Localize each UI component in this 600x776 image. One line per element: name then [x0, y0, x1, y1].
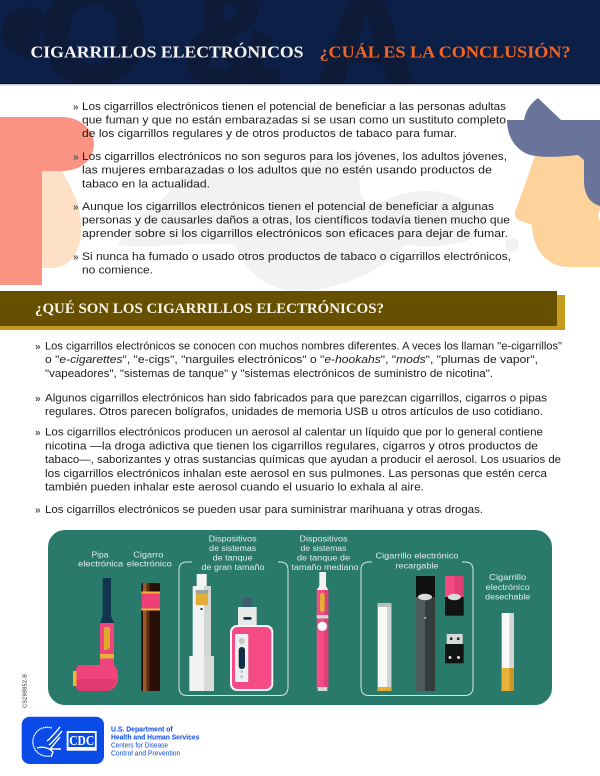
definition text block: Algunos cigarrillos electrónicos han sido fabricados para que parezcan cigarrillos, cigarros o pipas — [45, 392, 547, 404]
label: medium tank: Dispositivos — [300, 534, 348, 544]
icon: pod cartridge — [445, 576, 464, 616]
section banner — [0, 291, 565, 330]
definition text block: Los cigarrillos electrónicos se pueden usar para suministrar marihuana y otras drogas. — [45, 504, 483, 516]
agency names: U.S. Department of — [111, 726, 173, 734]
right profile: face and hair — [507, 98, 600, 267]
conclusions text block: » — [73, 252, 79, 263]
title: CIGARRILLOS ELECTRÓNICOS — [30, 42, 304, 62]
definition text block: » — [35, 394, 41, 404]
definition text block: los cigarrillos electrónicos inhalan este aerosol en sus pulmones. Las personas que estén cerca — [45, 468, 547, 480]
logo: HHS and CDC — [22, 717, 104, 764]
definition text block: nicotina —la droga adictiva que tienen los cigarrillos regulares, cigarros y otros productos de — [45, 440, 538, 452]
definition text block: » — [35, 428, 41, 438]
label: disposable: desechable — [485, 592, 530, 602]
label: large tank: de sistemas — [209, 544, 256, 553]
label: disposable: Cigarrillo — [489, 573, 527, 582]
agency names: Centers for Disease — [111, 742, 168, 750]
label: medium tank — [292, 534, 359, 572]
agency names: Health and Human Services — [111, 734, 199, 742]
conclusions text block: las mujeres embarazadas o los adultos que no estén usando productos de — [82, 164, 492, 176]
conclusions text block: » — [73, 102, 79, 113]
definition text block: regulares. Otros parecen bolígrafos, unidades de memoria USB u otros artículos de uso cotidiano. — [45, 406, 543, 418]
agency names — [111, 726, 199, 758]
conclusions text block: » — [73, 202, 79, 213]
conclusions text block: » — [73, 152, 79, 163]
label: medium tank: de tanque de — [297, 554, 350, 562]
conclusions text block: aprender sobre si los cigarrillos electrónicos son eficaces para dejar de fumar. — [82, 228, 508, 240]
label: medium tank: tamaño mediano — [292, 563, 359, 572]
label: e-cigar — [127, 550, 173, 568]
bracket: rechargeable group — [361, 562, 473, 696]
conclusions text block: Aunque los cigarrillos electrónicos tienen el potencial de beneficiar a algunas — [82, 201, 494, 213]
logo: HHS and CDC: CDC — [69, 734, 94, 749]
conclusions text block: personas y de causarles daños a otras, los científicos todavía tienen mucho que — [82, 214, 510, 226]
label: large tank: de tanque — [213, 554, 253, 562]
label: e-cigar: electrónico — [127, 560, 173, 568]
definition text block: » — [35, 342, 41, 352]
label: rechargeable — [376, 552, 459, 570]
definition text block: » — [35, 505, 41, 516]
label: disposable — [485, 573, 530, 602]
subtitle question: ¿CUÁL ES LA CONCLUSIÓN? — [320, 42, 570, 62]
section banner: ¿QUÉ SON LOS CIGARRILLOS ELECTRÓNICOS? — [35, 300, 384, 317]
label: rechargeable: recargable — [396, 562, 438, 570]
agency names: Control and Prevention — [111, 750, 180, 758]
definition text block: "vapeadores", "sistemas de tanque" y "sistemas electrónicos de suministro de nicotina". — [45, 368, 493, 380]
conclusions text block: Si nunca ha fumado o usado otros productos de tabaco o cigarrillos electrónicos, — [82, 251, 511, 263]
publication code: CS298852-B — [22, 674, 28, 708]
definition text block: o "e-cigarettes ", "e-cigs", "narguiles electrónicos" o " e-hookahs ", "mods ", "plumas de vapor", — [45, 354, 538, 366]
icon: large tank device — [189, 574, 214, 691]
bracket: large tank group — [179, 562, 288, 696]
icon: pod device — [416, 576, 435, 691]
decorative background: smoke cloud — [118, 150, 519, 291]
definition text block: tabaco—, saborizantes y otras sustancias químicas que ayudan a producir el aerosol. Los usuarios de — [45, 454, 561, 466]
label: rechargeable: Cigarrillo electrónico — [376, 552, 459, 560]
conclusions text block: Los cigarrillos electrónicos no son seguros para los jóvenes, los adultos jóvenes, — [82, 151, 507, 163]
conclusions text block: tabaco en la actualidad. — [82, 178, 210, 190]
left profile silhouette — [0, 117, 94, 285]
label: e-cigar: Cigarro — [133, 550, 164, 560]
icon: disposable e-cigarette — [502, 613, 514, 691]
label: large tank: Dispositivos — [209, 534, 257, 544]
conclusions text block — [73, 101, 511, 276]
conclusions text block: no comience. — [82, 264, 153, 276]
icon: medium tank device — [317, 572, 328, 691]
label: medium tank: de sistemas — [300, 544, 347, 553]
definition text block: Los cigarrillos electrónicos se conocen con muchos nombres diferentes. A veces los llaman "e-cigarrillos" — [45, 340, 562, 352]
icon: cig-a-like — [378, 603, 391, 691]
icon: e-pipe — [73, 578, 118, 691]
definition text block — [35, 340, 562, 516]
definition text block: también pueden inhalar este aerosol cuando el usuario lo exhala al aire. — [45, 482, 424, 494]
label: e-pipe: Pipa — [92, 550, 109, 560]
icon: box mod device — [230, 598, 273, 691]
label: large tank — [202, 534, 265, 572]
conclusions text block: de los cigarrillos regulares y de otros productos de tabaco para fumar. — [82, 128, 457, 140]
definition text block: Los cigarrillos electrónicos producen un aerosol al calentar un líquido que por lo general contiene — [45, 426, 543, 438]
conclusions text block: Los cigarrillos electrónicos tienen el potencial de beneficiar a las personas adultas — [82, 101, 506, 113]
label: e-pipe: electrónica — [78, 560, 124, 568]
header band — [0, 0, 600, 86]
panel: device types — [48, 530, 552, 705]
label: large tank: de gran tamaño — [202, 563, 265, 572]
label: e-pipe — [78, 550, 124, 568]
label: disposable: electrónico — [486, 583, 530, 592]
icon: e-cigar — [141, 583, 160, 691]
icon: USB charger — [445, 634, 464, 663]
conclusions text block: que fuman y que no están embarazadas si se usan como un sustituto completo — [82, 114, 506, 126]
